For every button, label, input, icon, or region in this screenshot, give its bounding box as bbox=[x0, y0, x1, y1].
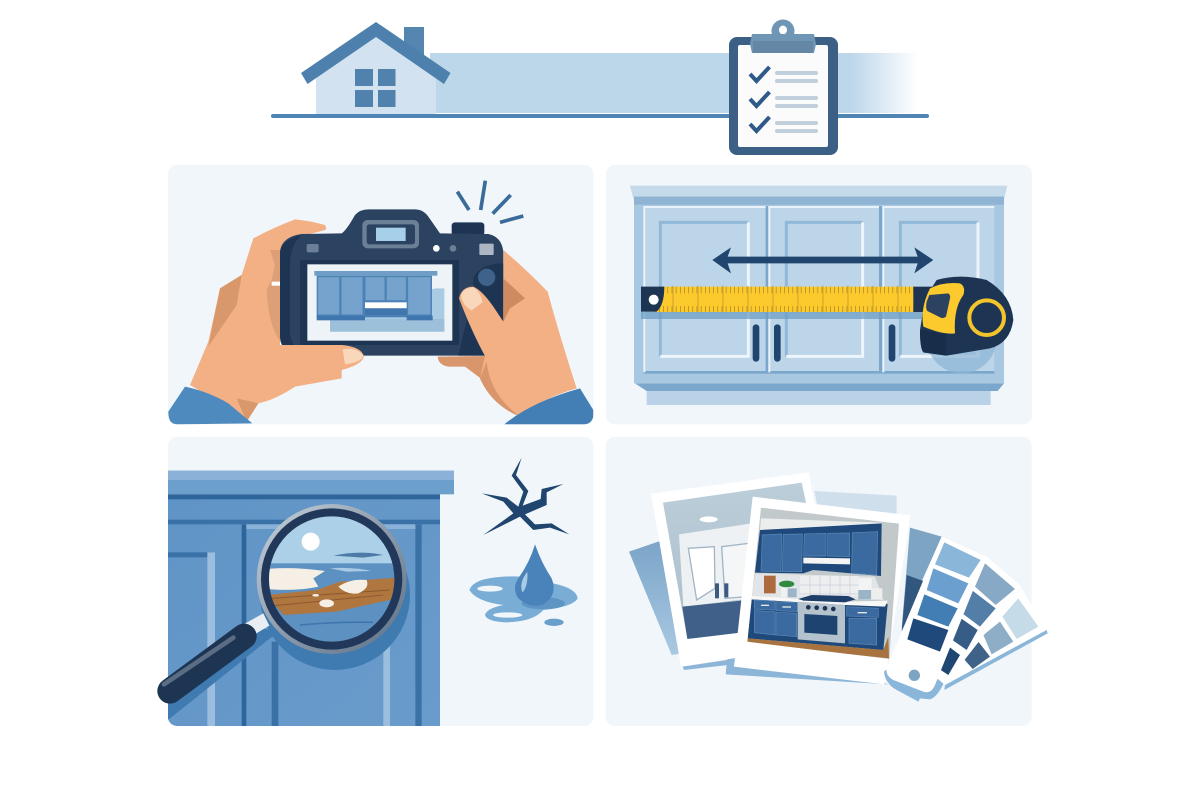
panel: photographing the cabinets bbox=[168, 165, 593, 424]
icon: camera bbox=[280, 209, 503, 356]
swatch leaf: lightest bbox=[938, 588, 1048, 690]
ground line bbox=[271, 114, 929, 118]
cabinet photo on camera screen bbox=[314, 271, 444, 332]
icon: tape measure case bbox=[920, 277, 1013, 356]
tape shadow bbox=[641, 303, 997, 373]
icon: flash lines bbox=[457, 181, 523, 222]
panel: measuring the cabinets bbox=[606, 165, 1032, 424]
icon: crack bbox=[482, 458, 569, 535]
header illustration: house and checklist bbox=[271, 20, 929, 155]
swatch leaf: front with hole bbox=[886, 537, 987, 692]
right hand and sleeves bbox=[168, 250, 593, 424]
icon: water puddle and drop bbox=[469, 544, 578, 626]
cabinet handles bbox=[753, 324, 895, 362]
blue cabinet close-up bbox=[168, 471, 454, 726]
finished kitchen photo bbox=[734, 497, 910, 684]
left thumb bbox=[280, 345, 364, 387]
double-headed arrow bbox=[712, 247, 933, 273]
icon: magnifying glass showing water damage bbox=[164, 504, 407, 691]
panel: before photos and colour swatches bbox=[606, 437, 1048, 726]
background photo shapes bbox=[629, 491, 942, 684]
paint swatch fan bbox=[884, 537, 1048, 702]
swatch leaf: middle bbox=[925, 557, 1022, 685]
left hand behind camera bbox=[190, 219, 342, 422]
icon: house bbox=[301, 22, 450, 114]
tape blade with ruler marks bbox=[641, 287, 933, 312]
older kitchen photo bbox=[651, 472, 814, 670]
icon: clipboard checklist bbox=[729, 20, 838, 155]
base cabinet bbox=[630, 186, 1007, 405]
light blue band bbox=[430, 53, 918, 113]
panel: inspecting for damage bbox=[164, 437, 593, 726]
